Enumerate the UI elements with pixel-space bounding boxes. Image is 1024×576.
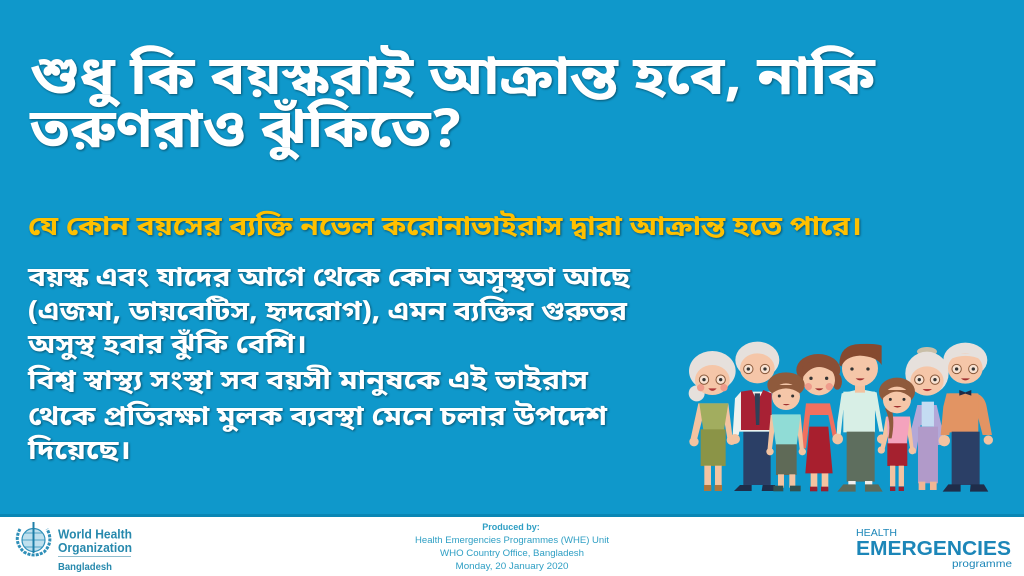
title: তরুণরাও ঝুঁকিতে? [29, 98, 462, 170]
footer: production credits: Monday, 20 January 2020 [456, 561, 568, 571]
body text: বিশ্ব স্বাস্থ্য সংস্থা সব বয়সী মানুষকে এই ভাইরাস [27, 364, 589, 401]
figure: grandmother right [905, 347, 949, 490]
highlighted statement: যে কোন বয়সের ব্যক্তি নভেল করোনাভাইরাস দ্বারা আক্রান্ত হতে পারে। [28, 210, 862, 247]
illustration: family of eight [689, 342, 993, 492]
logo: Health Emergencies programme [856, 527, 1012, 570]
body text: বয়স্ক এবং যাদের আগে থেকে কোন অসুস্থতা আছে [27, 262, 631, 298]
logo: Health Emergencies programme: EMERGENCIES [856, 538, 1011, 560]
figure: boy [766, 372, 806, 491]
figure: grandmother left [689, 351, 737, 491]
figure: girl [878, 378, 916, 491]
title [29, 45, 876, 170]
body text [27, 262, 631, 471]
figure: father [832, 344, 886, 492]
footer: production credits: Health Emergencies Programmes (WHE) Unit [415, 535, 610, 545]
footer: production credits [415, 522, 610, 571]
figure: grandfather left [730, 342, 779, 491]
logo: Health Emergencies programme: programme [952, 558, 1012, 570]
panel: white footer [0, 517, 1024, 576]
body text: (এজমা, ডায়বেটিস, হৃদরোগ), এমন ব্যক্তির গুরুতর [28, 295, 628, 332]
body text: দিয়েছে। [27, 434, 131, 471]
body text: থেকে প্রতিরক্ষা মুলক ব্যবস্থা মেনে চলার উপদেশ [28, 400, 608, 437]
footer: production credits: Produced by: [482, 522, 540, 532]
title: শুধু কি বয়স্করাই আক্রান্ত হবে, নাকি [30, 45, 876, 117]
icon: WHO emblem [17, 522, 50, 555]
figure: mother [796, 354, 842, 491]
footer: production credits: WHO Country Office, Bangladesh [440, 548, 584, 558]
body text: অসুস্থ হবার ঝুঁকি বেশি। [27, 328, 307, 365]
logo: World Health Organization Bangladesh: World Health [58, 526, 132, 542]
logo: World Health Organization Bangladesh: Organization [58, 540, 132, 555]
logo: World Health Organization Bangladesh [17, 522, 132, 573]
logo: Health Emergencies programme: HEALTH [856, 527, 897, 539]
logo: World Health Organization Bangladesh: Bangladesh [58, 562, 112, 573]
figure: grandfather right [939, 343, 993, 492]
